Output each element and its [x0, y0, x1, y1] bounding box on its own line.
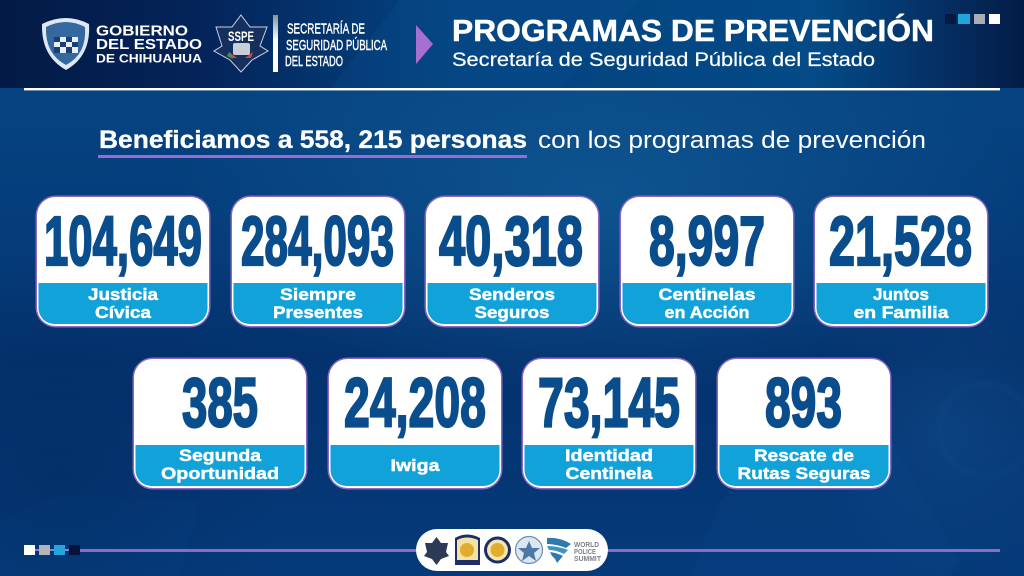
card: Iwiga: 24,208 — [344, 364, 486, 442]
text: Secretaría de Seguridad Pública del Estado — [285, 20, 387, 70]
card: Centinelas en Acción: 8,997 — [649, 202, 765, 280]
footer line — [24, 549, 1000, 552]
logo: Gobierno del Estado de Chihuahua — [42, 18, 202, 70]
text: Secretaría de Seguridad Pública del Estado: SEGURIDAD PÚBLICA — [286, 37, 387, 54]
card: Siempre Presentes: Siempre — [280, 285, 356, 304]
header band — [0, 0, 1024, 88]
card: Rescate de Rutas Seguras: Rutas Seguras — [738, 464, 870, 483]
card: Rescate de Rutas Seguras — [716, 358, 892, 490]
card: Siempre Presentes — [230, 196, 406, 328]
text: Secretaría de Seguridad Pública del Estado: DEL ESTADO — [285, 53, 343, 70]
card: Justicia Cívica — [36, 196, 210, 328]
card: Iwiga — [328, 358, 502, 490]
icon: CALEA shield — [455, 534, 480, 565]
logo: SSPE — [214, 15, 387, 72]
text: World Police Summit — [574, 542, 602, 563]
headline — [98, 126, 926, 158]
divider — [273, 15, 278, 72]
card: Rescate de Rutas Seguras: 893 — [765, 364, 842, 442]
decorative squares top — [945, 14, 1000, 24]
headline: con los programas de prevención — [538, 127, 926, 154]
card: Segunda Oportunidad — [132, 358, 308, 490]
card: Justicia Cívica: 104,649 — [44, 202, 202, 280]
card: Segunda Oportunidad: Oportunidad — [161, 464, 279, 483]
title: PROGRAMAS DE PREVENCIÓN — [452, 12, 934, 48]
icon: SSPE star badge: SSPE — [228, 28, 254, 44]
header divider line — [24, 88, 1000, 90]
card: Senderos Seguros: Seguros — [474, 303, 550, 322]
text: Gobierno del Estado de Chihuahua: DEL ESTADO — [96, 37, 202, 53]
icon: World Police Summit mark — [547, 538, 571, 563]
text: Secretaría de Seguridad Pública del Estado: SECRETARÍA DE — [287, 20, 365, 38]
text: World Police Summit: SUMMIT — [574, 556, 602, 563]
text: Gobierno del Estado de Chihuahua: GOBIERNO — [96, 24, 188, 40]
card: Segunda Oportunidad: Segunda — [179, 446, 262, 465]
card: Siempre Presentes: 284,093 — [241, 202, 394, 280]
text: World Police Summit: POLICE — [574, 549, 596, 556]
card: Iwiga: Iwiga — [390, 456, 440, 475]
arrow — [416, 25, 433, 64]
card: Justicia Cívica: Justicia — [88, 285, 159, 304]
subtitle: Secretaría de Seguridad Pública del Estado — [452, 50, 875, 71]
text: Gobierno del Estado de Chihuahua: DE CHIHUAHUA — [96, 54, 202, 66]
card: Rescate de Rutas Seguras: Rescate de — [754, 446, 854, 465]
icon: blue star seal — [516, 536, 542, 564]
card: Identidad Centinela: Identidad — [565, 446, 653, 465]
card: Siempre Presentes: Presentes — [273, 303, 363, 322]
card: Identidad Centinela — [522, 358, 696, 490]
icon: state shield — [42, 18, 89, 70]
icon: CALEA seal — [484, 536, 511, 564]
headline: Beneficiamos a 558, 215 personas — [99, 126, 527, 154]
decorative squares footer — [24, 545, 80, 555]
card: Senderos Seguros — [424, 196, 600, 328]
card: Senderos Seguros: 40,318 — [439, 202, 583, 280]
card: Juntos en Familia — [814, 196, 988, 328]
card: Senderos Seguros: Senderos — [469, 285, 555, 304]
card: Centinelas en Acción — [620, 196, 794, 328]
card: Centinelas en Acción: Centinelas — [658, 285, 756, 304]
card: Identidad Centinela: 73,145 — [538, 364, 680, 442]
icon: SSPE star badge — [214, 15, 268, 72]
card: Identidad Centinela: Centinela — [566, 464, 653, 483]
card: Centinelas en Acción: en Acción — [664, 303, 750, 322]
text: Gobierno del Estado de Chihuahua — [96, 24, 202, 66]
icon: SSPE badge — [424, 537, 449, 565]
text: World Police Summit: WORLD — [574, 542, 599, 549]
card: Segunda Oportunidad: 385 — [182, 364, 258, 442]
card: Juntos en Familia: Juntos — [873, 285, 929, 304]
footer logo pill — [416, 529, 608, 571]
card: Juntos en Familia: en Familia — [854, 303, 949, 322]
card: Justicia Cívica: Cívica — [95, 303, 152, 322]
